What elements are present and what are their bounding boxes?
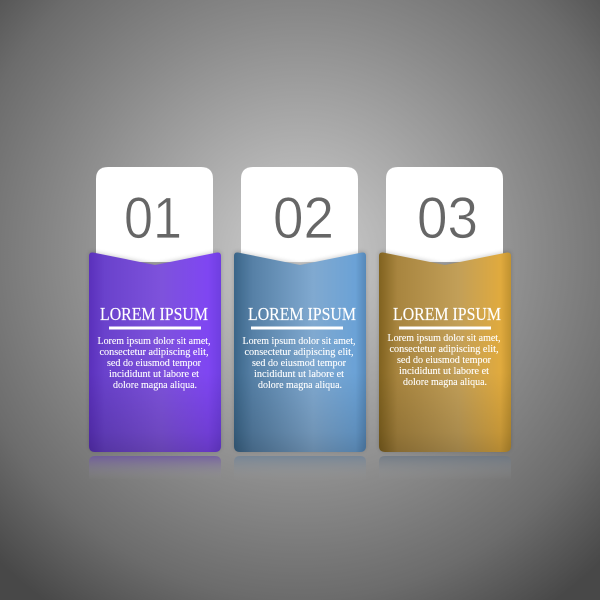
pocket shadow 01 bbox=[89, 251, 221, 451]
white number tab 01 bbox=[96, 167, 213, 262]
body text 03: Lorem ipsum dolor sit amet, bbox=[388, 332, 501, 344]
underline 03 bbox=[399, 326, 491, 330]
body text 01: consectetur adipiscing elit, bbox=[100, 346, 209, 358]
body text 02: dolore magna aliqua. bbox=[258, 379, 342, 391]
pocket shadow 02 bbox=[234, 251, 366, 451]
reflection 01 bbox=[89, 456, 221, 480]
body text 02: sed do eiusmod tempor bbox=[252, 357, 346, 369]
heading 01: LOREM IPSUM bbox=[100, 304, 208, 324]
body text 02: Lorem ipsum dolor sit amet, bbox=[242, 335, 356, 347]
pocket bottom shade 03 bbox=[379, 252, 511, 452]
pocket bottom shade 01 bbox=[89, 252, 221, 452]
panel: card 01 bbox=[89, 167, 221, 480]
number 03: 03 bbox=[417, 186, 478, 251]
body text 02: consectetur adipiscing elit, bbox=[244, 346, 354, 358]
body text 01: incididunt ut labore et bbox=[109, 368, 199, 380]
reflection 03 bbox=[379, 456, 511, 480]
white number tab 02 bbox=[241, 167, 358, 262]
body text 03: consectetur adipiscing elit, bbox=[390, 343, 499, 355]
body text 02 bbox=[242, 335, 356, 391]
heading 03: LOREM IPSUM bbox=[393, 304, 501, 324]
body text 03: dolore magna aliqua. bbox=[403, 376, 487, 388]
number 01: 01 bbox=[124, 186, 182, 251]
panel: card 02 bbox=[234, 167, 366, 480]
body text 01: dolore magna aliqua. bbox=[113, 379, 197, 391]
body text 01: Lorem ipsum dolor sit amet, bbox=[98, 335, 211, 347]
underline 01 bbox=[109, 326, 201, 330]
body text 02: incididunt ut labore et bbox=[254, 368, 344, 380]
body text 01: sed do eiusmod tempor bbox=[107, 357, 201, 369]
body text 03 bbox=[388, 332, 501, 388]
pocket bottom shade 02 bbox=[234, 252, 366, 452]
body text 03: sed do eiusmod tempor bbox=[397, 354, 491, 366]
reflection 02 bbox=[234, 456, 366, 480]
underline 02 bbox=[251, 326, 343, 330]
white number tab 03 bbox=[386, 167, 503, 262]
body text 03: incididunt ut labore et bbox=[399, 365, 489, 377]
number 02: 02 bbox=[273, 186, 334, 251]
panel: card 03 bbox=[379, 167, 511, 480]
purple pocket 01 bbox=[89, 252, 221, 452]
pocket shadow 03 bbox=[379, 251, 511, 451]
gold pocket 03 bbox=[379, 252, 511, 452]
body text 01 bbox=[98, 335, 211, 391]
blue pocket 02 bbox=[234, 252, 366, 452]
heading 02: LOREM IPSUM bbox=[248, 304, 356, 324]
